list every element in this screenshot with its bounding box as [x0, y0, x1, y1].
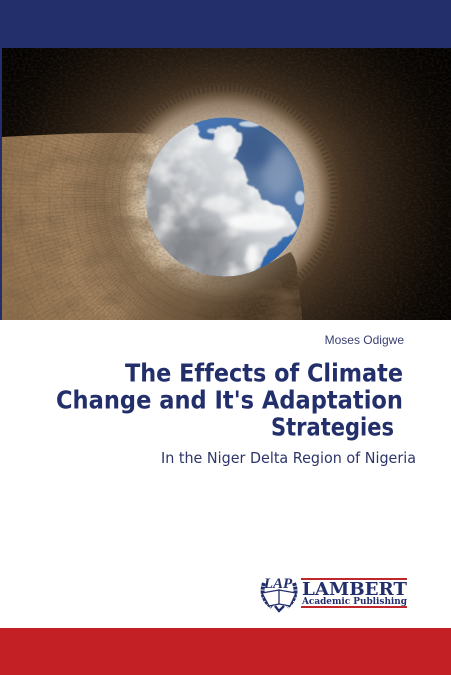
dark inner tower wall [2, 48, 451, 320]
grey cloud shadow [154, 226, 230, 270]
title: Change and It's Adaptation [56, 386, 403, 414]
cover photograph: view up a cooling tower [2, 48, 451, 320]
author: Moses Odigwe [325, 333, 404, 347]
logo rules [301, 578, 407, 580]
bottom red band [0, 628, 451, 675]
logo emblem: wreath and open book [262, 576, 296, 611]
blue sky [145, 117, 305, 277]
lit tan wall section [2, 132, 302, 320]
cloud highlights [202, 133, 286, 272]
publisher logo [262, 576, 408, 611]
title: Strategies [271, 412, 394, 442]
circular opening with sky and clouds [140, 115, 305, 285]
top navy band [0, 0, 451, 48]
logo emblem: wreath and open book: LAP [263, 576, 293, 592]
left navy edge [0, 48, 2, 320]
subtitle: In the Niger Delta Region of Nigeria [161, 449, 416, 467]
small top clouds [207, 121, 305, 205]
publisher logo: Academic Publishing [301, 597, 408, 607]
title [56, 358, 403, 442]
cloud mass [146, 124, 298, 276]
logo wordmark: LAMBERT [302, 579, 408, 600]
title: The Effects of Climate [125, 358, 403, 388]
